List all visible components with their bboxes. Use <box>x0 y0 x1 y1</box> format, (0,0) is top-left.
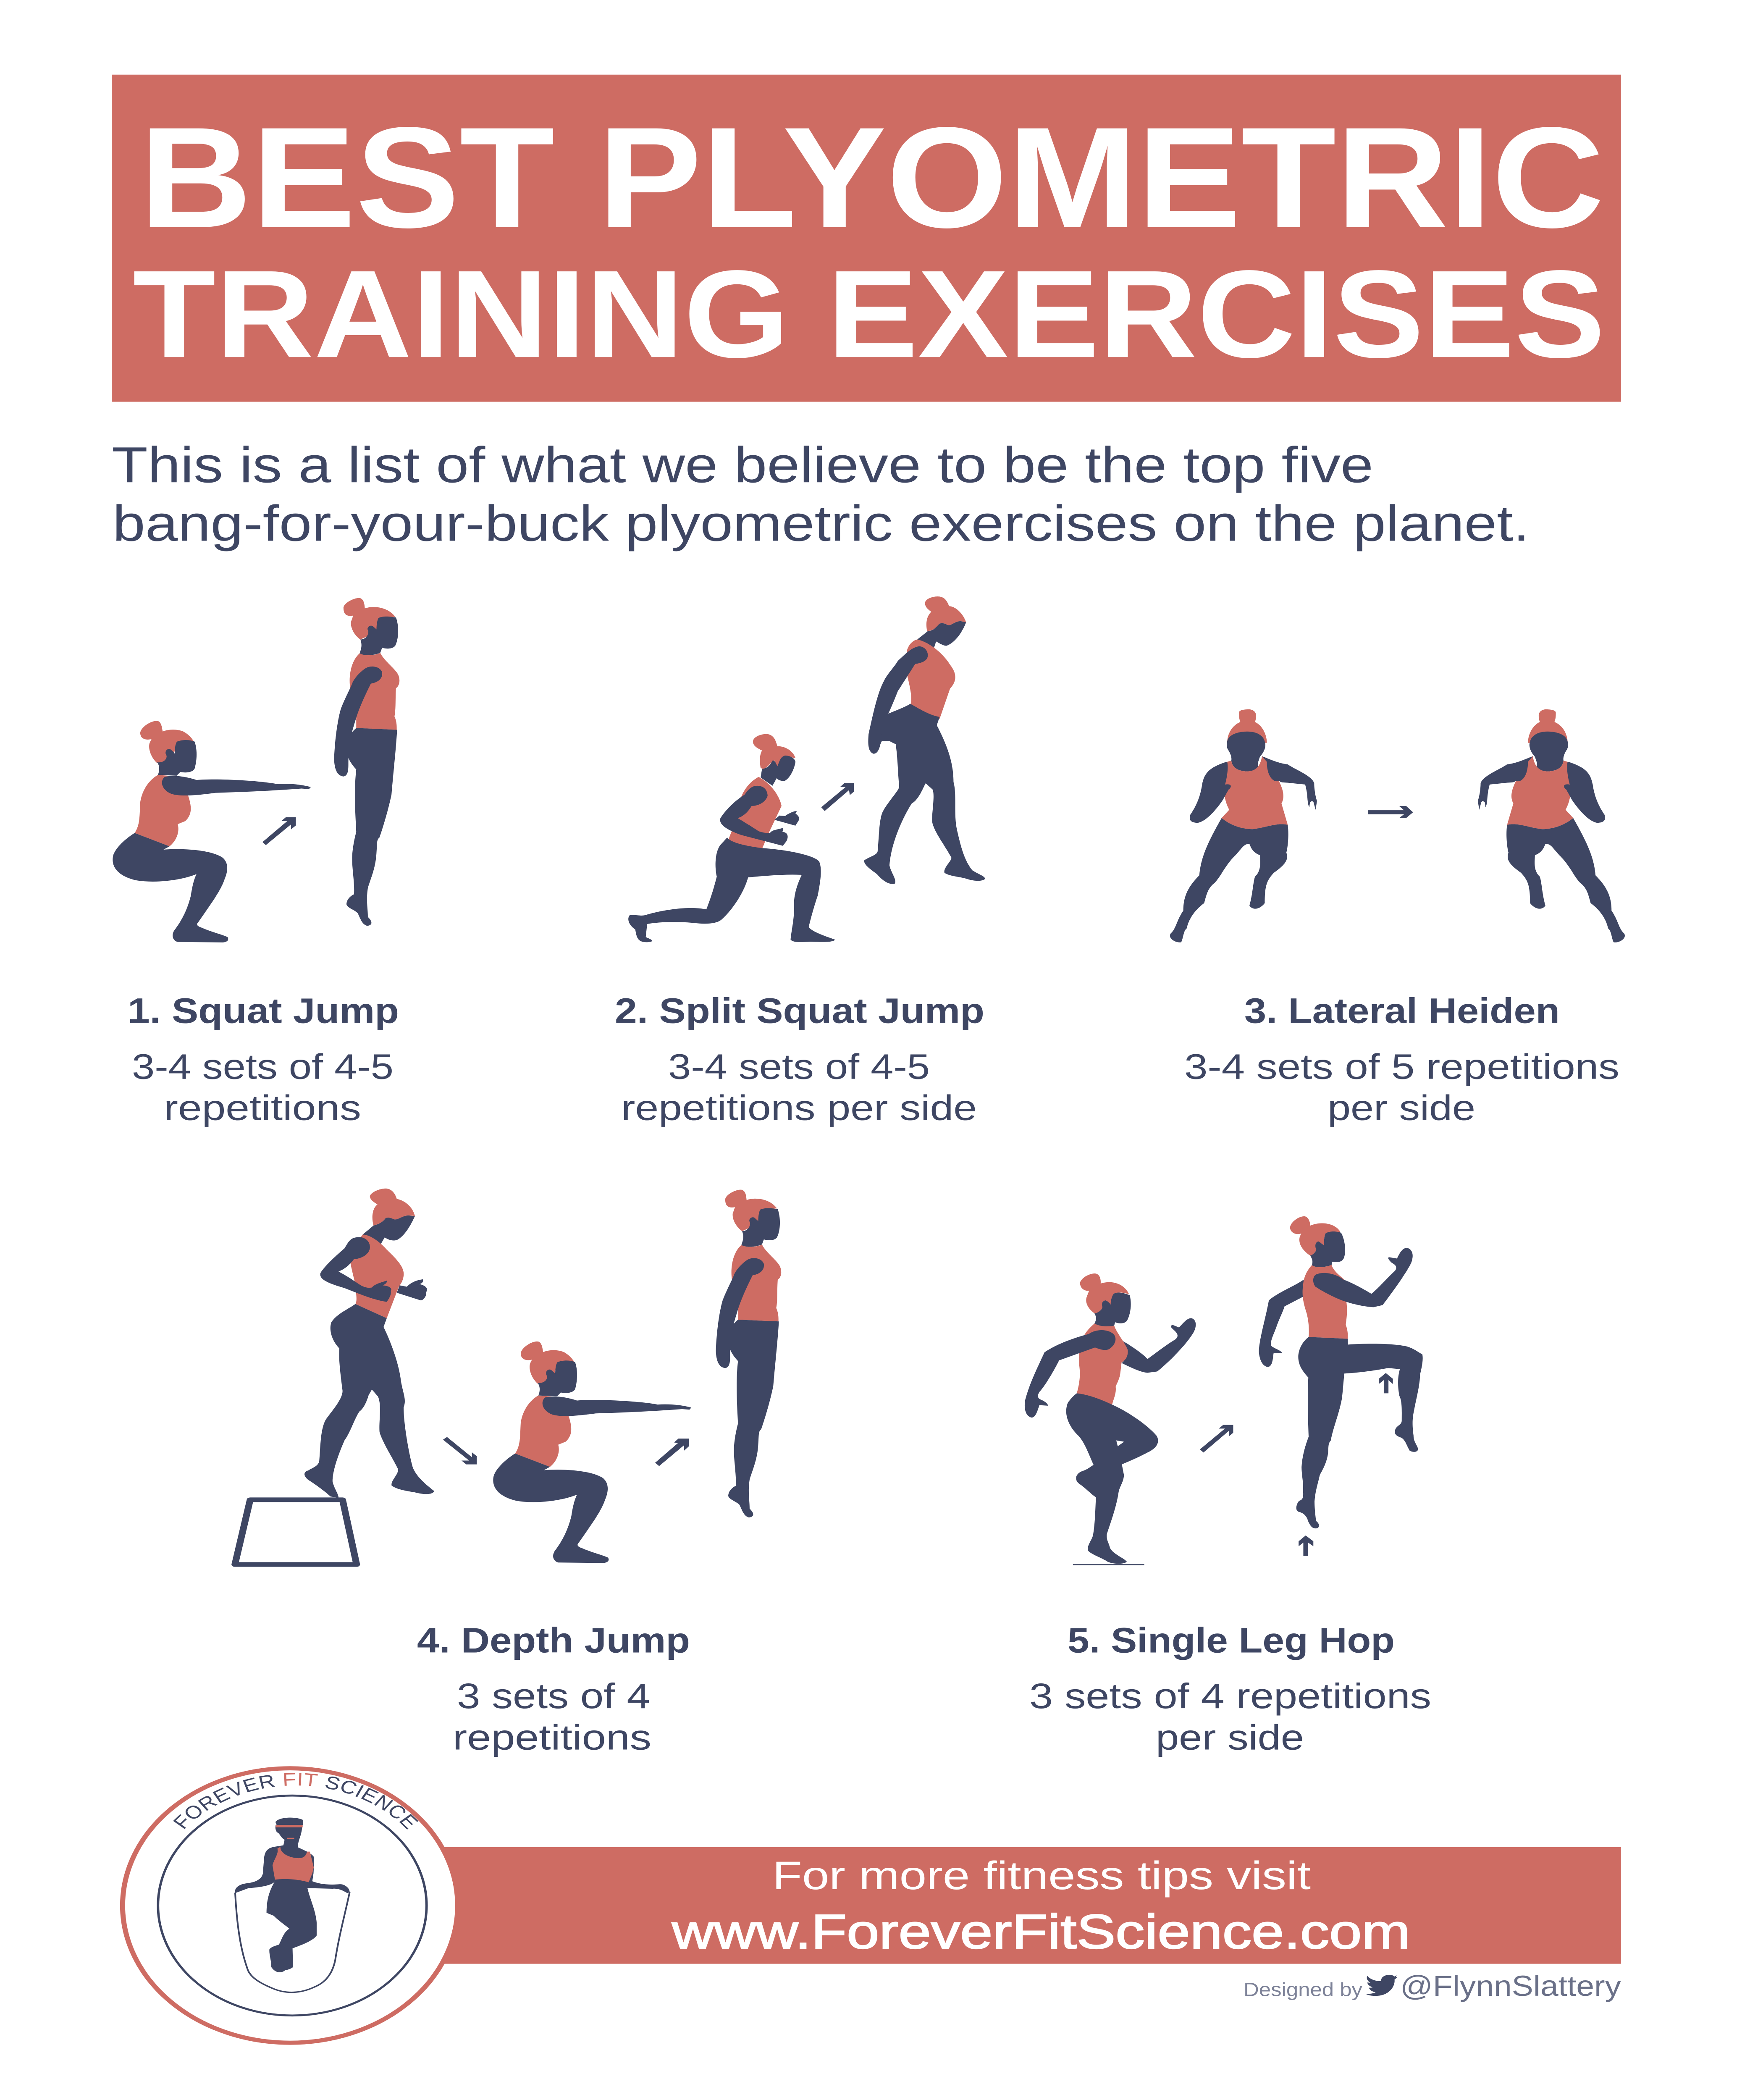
exercise 1 caption: 3-4 sets of 4-5 <box>132 1047 394 1086</box>
exercise 5 caption <box>1029 1620 1431 1757</box>
arrow up (knee) <box>1379 1373 1393 1393</box>
airborne figure <box>1259 1216 1423 1528</box>
exercise 5 caption: 5. Single Leg Hop <box>1068 1620 1395 1660</box>
exercise 2 caption: 3-4 sets of 4-5 <box>668 1047 930 1086</box>
designer credit: @FlynnSlattery <box>1400 1970 1621 2002</box>
exercise 1 caption: 1. Squat Jump <box>128 991 399 1031</box>
title banner: TRAINING EXERCISES <box>133 244 1605 384</box>
logo wordmark: FOREVER FIT SCIENCE <box>168 1769 422 1833</box>
arrow up-right <box>821 783 854 811</box>
standing figure <box>334 598 399 926</box>
designer credit <box>1244 1970 1621 2002</box>
logo badge <box>123 1768 458 2043</box>
exercise 3 caption: 3-4 sets of 5 repetitions <box>1184 1047 1619 1086</box>
arrow right <box>1368 806 1413 818</box>
exercise 4 caption: repetitions <box>453 1717 651 1757</box>
right figure <box>1478 709 1625 942</box>
left figure <box>1170 709 1317 942</box>
intro text <box>112 437 1530 551</box>
step-down figure <box>304 1189 434 1498</box>
squat figure <box>493 1341 691 1563</box>
standing figure <box>716 1190 781 1517</box>
exercise 5 illustration: single leg hop <box>1025 1216 1423 1565</box>
step-down figure and box <box>235 1189 689 1564</box>
arrow up-right <box>1200 1425 1233 1452</box>
logo skipping figure <box>235 1818 350 1992</box>
squat figure <box>113 721 311 942</box>
exercise 2 caption <box>615 991 984 1128</box>
exercise 3 illustration: lateral heiden <box>1170 709 1625 942</box>
exercise 2 caption: 2. Split Squat Jump <box>615 991 984 1031</box>
arrow up (foot) <box>1299 1536 1313 1556</box>
exercise 3 caption: 3. Lateral Heiden <box>1244 991 1560 1031</box>
kneeling figure <box>628 734 835 942</box>
exercise 2 caption: repetitions per side <box>621 1088 977 1128</box>
exercise 5 caption: 3 sets of 4 repetitions <box>1029 1676 1431 1716</box>
title banner <box>112 75 1621 402</box>
exercise 3 caption: per side <box>1328 1088 1475 1128</box>
intro text: bang-for-your-buck plyometric exercises on the planet. <box>113 495 1530 551</box>
designer credit: Designed by <box>1244 1979 1363 2000</box>
arrow up-right <box>262 817 296 845</box>
exercise 4 caption <box>417 1620 690 1757</box>
exercise 1 caption <box>128 991 399 1128</box>
exercise 1 caption: repetitions <box>164 1088 361 1128</box>
arrow down-right <box>443 1437 477 1465</box>
exercise 4 caption: 4. Depth Jump <box>417 1620 690 1660</box>
plyo box <box>235 1500 357 1564</box>
intro text: This is a list of what we believe to be the top five <box>112 437 1373 493</box>
icon: bird <box>1366 1975 1398 1996</box>
footer bar: For more fitness tips visit <box>772 1853 1311 1898</box>
exercise 2 illustration: split squat jump <box>628 596 985 942</box>
exercise 5 caption: per side <box>1156 1717 1304 1757</box>
footer bar: www.ForeverFitScience.com <box>672 1905 1410 1959</box>
exercise 1 illustration: squat jump <box>113 598 399 942</box>
footer bar <box>420 1847 1621 1964</box>
take-off figure <box>1025 1273 1196 1564</box>
arrow up-right <box>655 1438 689 1466</box>
jumping figure <box>864 596 985 884</box>
exercise 4 illustration: depth jump <box>235 1189 781 1564</box>
exercise 3 caption <box>1184 991 1619 1128</box>
ground line <box>1073 1564 1144 1565</box>
exercise 4 caption: 3 sets of 4 <box>457 1676 650 1716</box>
title banner: BEST PLYOMETRIC <box>139 97 1604 257</box>
